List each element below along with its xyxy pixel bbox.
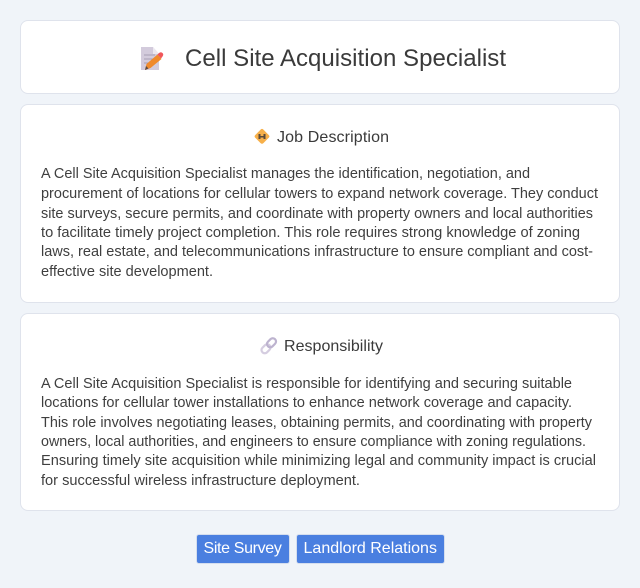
text block: responsibility paragraph: This role involves negotiating leases, obtaining permits, and coordinating with property (41, 415, 593, 431)
heading: job description: Job Description (277, 129, 389, 146)
tag: landlord relations (296, 534, 444, 564)
icon: chain link (260, 337, 278, 354)
text block: job description paragraph: laws, real estate, and telecommunications infrastructure to ensure compliant and cost- (41, 244, 593, 260)
text block: job description paragraph: to facilitate timely project completion. This role requires strong knowledge of zoning (41, 225, 580, 241)
text block: job description paragraph: site surveys, secure permits, and coordinate with property owners and local authorities (41, 206, 593, 222)
text block: job description paragraph: A Cell Site Acquisition Specialist manages the identification, negotiation, and (41, 166, 530, 182)
panel: title card (20, 20, 620, 94)
tag: site survey: Site Survey (204, 540, 281, 557)
text block: responsibility paragraph: for successful wireless infrastructure deployment. (41, 473, 360, 489)
panel: job description (20, 104, 620, 303)
text block: responsibility paragraph: locations for cellular tower installations to enhance network coverage and capacity. (41, 395, 572, 411)
text block: job description paragraph: procurement of locations for cellular towers to expand network coverage. They conduct (41, 186, 598, 202)
panel: responsibility (20, 313, 620, 511)
heading: responsibility: Responsibility (284, 338, 383, 355)
text block: responsibility paragraph: A Cell Site Acquisition Specialist is responsible for identifying and securing suitable (41, 376, 572, 392)
icon: diamond road sign (254, 128, 270, 144)
text block: responsibility paragraph: Ensuring timely site acquisition while minimizing legal and community impact is crucial (41, 453, 596, 469)
icon: document with pencil (141, 47, 164, 70)
tag: site survey (196, 534, 290, 564)
tag: landlord relations: Landlord Relations (304, 540, 437, 557)
text block: job description paragraph (41, 166, 598, 280)
text block: job description paragraph: effective site development. (41, 264, 213, 280)
text block: responsibility paragraph: owners, local authorities, and engineers to ensure compliance with zoning regulations. (41, 434, 586, 450)
title: Cell Site Acquisition Specialist (185, 45, 506, 72)
